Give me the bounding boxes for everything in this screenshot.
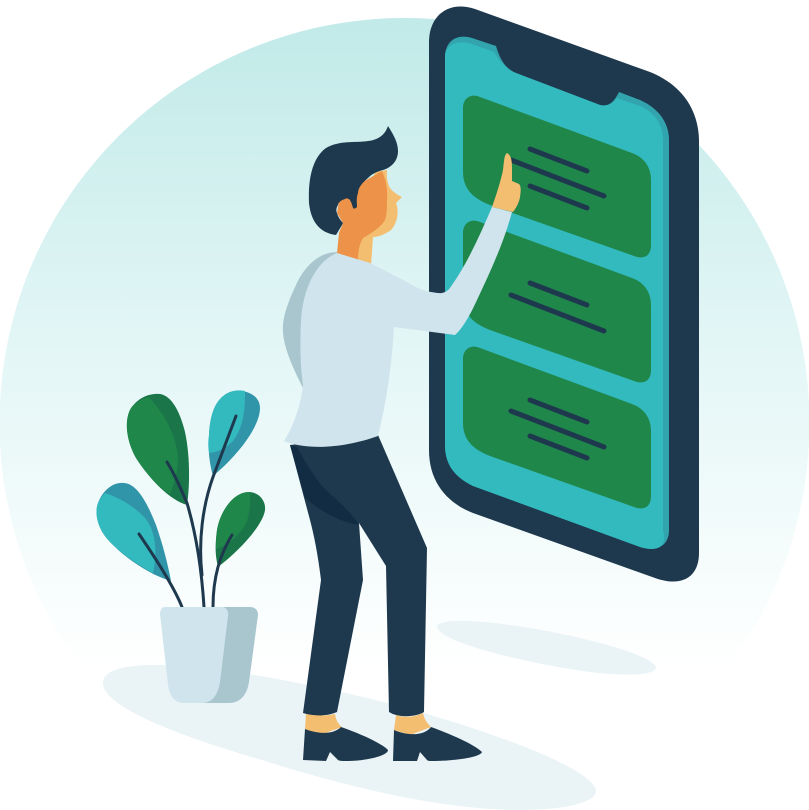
sock right	[394, 713, 431, 735]
pot shade	[170, 607, 258, 703]
face light	[350, 170, 402, 266]
card 2	[463, 221, 651, 382]
hair	[309, 126, 398, 235]
phone screen shade	[445, 37, 669, 549]
leaf: top right	[208, 390, 260, 476]
pants shade	[290, 445, 359, 525]
pot	[160, 607, 228, 703]
shoe right	[393, 727, 482, 761]
phone screen	[445, 42, 664, 549]
card 3 lines	[511, 400, 604, 458]
pants	[290, 435, 427, 716]
shoe left	[303, 727, 388, 761]
leaf: mid right	[216, 492, 265, 567]
ground shadow: large	[103, 665, 596, 810]
card 1	[463, 96, 651, 257]
plant stems	[139, 416, 236, 607]
sweater back shade	[283, 252, 337, 390]
person	[283, 126, 521, 761]
leaf: top left	[127, 394, 189, 505]
sweater	[284, 207, 512, 447]
phone	[429, 6, 699, 582]
sock left	[305, 714, 342, 735]
leaf: left	[96, 483, 171, 581]
ground shadow: phone	[437, 621, 656, 675]
hand	[492, 153, 521, 212]
face and neck dark, with ear	[337, 171, 387, 260]
card 3	[463, 347, 651, 508]
card 1 lines	[511, 149, 604, 208]
phone body	[429, 6, 699, 582]
card 2 lines	[511, 283, 604, 331]
potted plant	[96, 390, 265, 703]
